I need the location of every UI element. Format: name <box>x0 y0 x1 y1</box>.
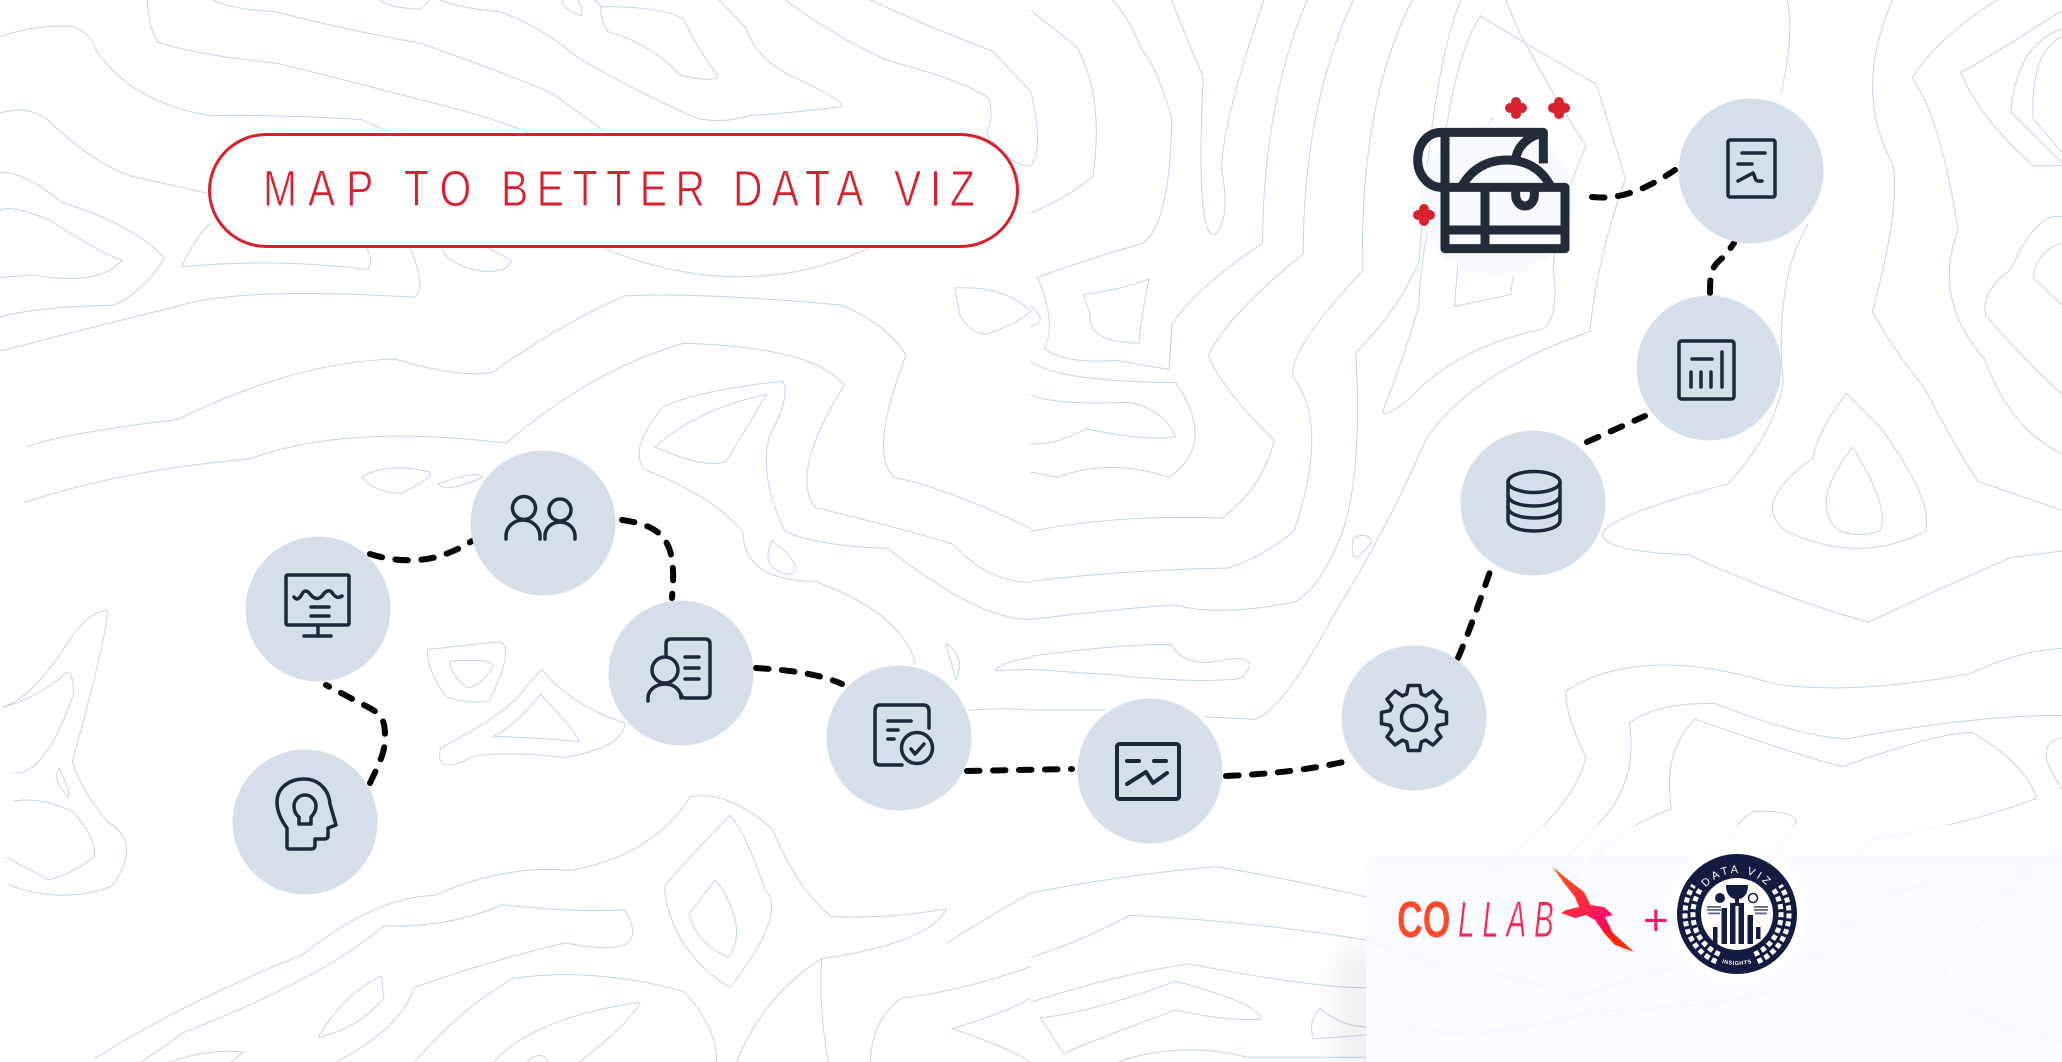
node: database <box>1460 430 1606 576</box>
node: team <box>470 450 616 596</box>
icon: presentation monitor <box>286 575 349 636</box>
dashed path: gear to database <box>1458 566 1492 658</box>
logo: Collab wordmark: CO <box>1397 892 1451 949</box>
badge trophy <box>1726 885 1748 906</box>
node: monitor <box>246 536 390 682</box>
dashed path: checklist to chart <box>967 769 1072 771</box>
icon: red sparkle left <box>1413 204 1435 226</box>
title text: MAP <box>263 160 373 217</box>
badge lettering: INSIGHTS <box>1722 959 1752 965</box>
treasure pale circle backdrop <box>1419 123 1573 277</box>
icon: bar chart report <box>1679 341 1734 399</box>
node: report <box>1678 98 1824 244</box>
icon: document with check badge <box>875 705 932 765</box>
logo: Data Viz Insights badge <box>1677 854 1805 974</box>
dashed path: report to treasure <box>1592 170 1675 198</box>
dashed path: monitor to team <box>370 541 472 560</box>
icon: person with document <box>648 639 710 701</box>
badge lettering: DATA VIZ <box>1701 865 1772 887</box>
title text: BETTER <box>501 160 705 217</box>
badge laurel wreath <box>1685 885 1789 962</box>
logo: Collab wordmark <box>1397 891 1554 949</box>
icon: red sparkle top left <box>1505 97 1527 119</box>
title pill <box>210 134 1018 246</box>
node: bars <box>1636 296 1782 440</box>
node: person document <box>608 600 754 746</box>
dashed path: person document to checklist <box>756 668 842 684</box>
node: checklist <box>826 666 972 810</box>
icon: line chart frame <box>1117 744 1179 799</box>
title text: DATA <box>733 160 864 217</box>
dashed path: head to monitor <box>326 685 385 783</box>
dashed path: chart to gear <box>1226 760 1352 776</box>
dashed path: bars to report <box>1710 243 1734 293</box>
badge lettering <box>1701 865 1772 965</box>
icon: document with trend <box>1728 140 1775 197</box>
node: gear <box>1342 646 1486 790</box>
dashed path: database to bars <box>1587 416 1645 442</box>
icon: gear <box>1382 686 1446 750</box>
node: chart <box>1078 698 1222 844</box>
logo: Collab bird <box>1552 867 1634 952</box>
icon: red sparkle top right <box>1548 97 1570 119</box>
icon: database <box>1508 472 1560 531</box>
icon: two people <box>506 496 575 539</box>
panel: partner logos <box>1366 825 2062 1062</box>
title text: TO <box>404 160 471 217</box>
badge bars and stripes <box>1707 893 1768 944</box>
node: head with lightbulb <box>232 750 378 894</box>
icon: head with lightbulb <box>277 779 336 849</box>
title text <box>263 160 975 217</box>
icon: treasure chest <box>1418 132 1565 249</box>
title text: VIZ <box>894 160 975 217</box>
plus sign: + <box>1643 896 1669 945</box>
panel shadow <box>1338 954 1366 1062</box>
logo: Collab wordmark: LLAB <box>1458 891 1554 948</box>
dashed path: team to person document <box>622 520 673 598</box>
